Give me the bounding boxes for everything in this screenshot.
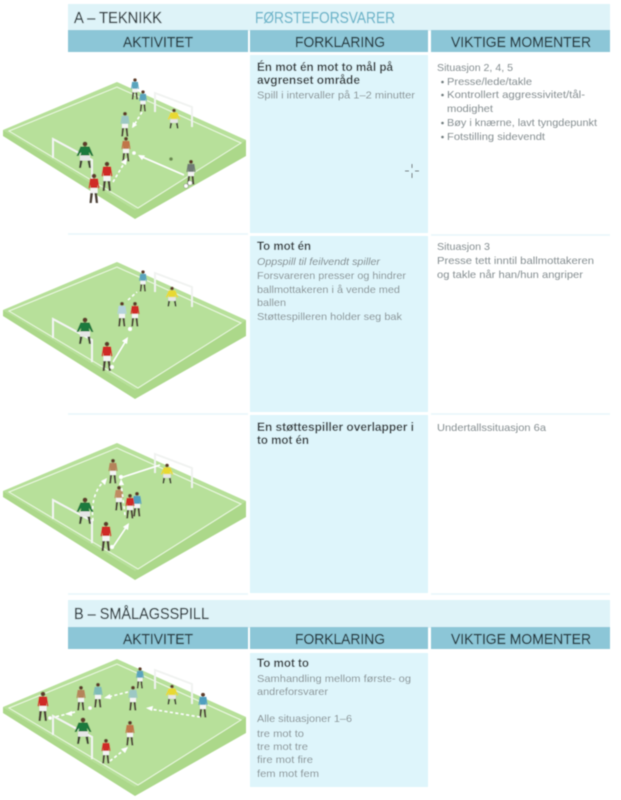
crosshair mark — [405, 164, 419, 178]
column heading: Forklaring: FORKLARING — [295, 631, 385, 648]
table header row A — [68, 30, 610, 52]
explanation panel: row B — [250, 653, 428, 787]
column heading: Aktivitet: AKTIVITET — [123, 34, 193, 51]
explanation panel: row 3 — [250, 415, 428, 593]
key points: row 2: og takle når han/hun angriper — [437, 269, 584, 281]
passing arrows — [113, 292, 137, 362]
bold title row 3: En støttespiller overlapper i — [257, 422, 414, 434]
row separators — [68, 233, 610, 595]
column heading: Viktige momenter: VIKTIGE MOMENTER — [451, 631, 591, 648]
explanation text row B: fem mot fem — [257, 768, 319, 780]
bold title row 1: Én mot én mot to mål på — [257, 61, 394, 74]
table header row B — [68, 627, 610, 649]
diagram: pitch row 3 — [3, 443, 246, 580]
section band: A - Teknikk — [68, 4, 610, 31]
explanation panel: row 1 — [250, 55, 428, 233]
column heading: Forklaring: FORKLARING — [295, 34, 385, 51]
column heading: Aktivitet: AKTIVITET — [123, 631, 193, 648]
key points: row 1: Bøy i knærne, lavt tyngdepunkt — [447, 117, 597, 129]
explanation text row 2: Forsvareren presser og hindrer — [257, 270, 407, 282]
key points: row 2: Presse tett inntil ballmottakeren — [437, 255, 594, 267]
explanation panel: row 2 — [250, 236, 428, 412]
key points: row 1: Situasjon 2, 4, 5 — [437, 62, 513, 74]
heading: Førsteforsvarer: FØRSTEFORSVARER — [255, 10, 395, 27]
players — [76, 459, 173, 551]
explanation text row B — [257, 673, 411, 780]
key points: row 1 — [437, 62, 597, 143]
bold title row B: To mot to — [257, 658, 309, 670]
column heading: Viktige momenter: VIKTIGE MOMENTER — [451, 34, 591, 51]
explanation text row 1: Spill i intervaller på 1–2 minutter — [257, 90, 416, 102]
explanation text row B: andreforsvarer — [257, 686, 329, 698]
passing arrows — [55, 692, 200, 761]
explanation text row 2: ballen — [257, 297, 286, 309]
arrow heads — [65, 694, 153, 753]
diagram: pitch row 2 — [3, 262, 246, 399]
explanation text row B: fire mot fire — [257, 754, 313, 766]
bold title row 2: To mot én — [257, 241, 311, 253]
section band: B - Smålagsspill — [68, 600, 610, 628]
explanation text row B: Alle situasjoner 1–6 — [257, 713, 352, 725]
key points: row 1: Fotstilling sidevendt — [447, 131, 545, 143]
bold title row 3 line 2: to mot én — [257, 435, 309, 447]
key points: row 1: modighet — [447, 103, 493, 115]
players — [38, 667, 208, 763]
diagram: pitch row B — [3, 659, 246, 796]
key points: row 1: Presse/lede/takle — [447, 76, 532, 88]
explanation text row 2: ballmottakeren i å vende med — [257, 284, 400, 296]
players — [76, 78, 196, 203]
key points: row 2: Situasjon 3 — [437, 241, 490, 253]
heading: B - Smålagsspill: B – SMÅLAGSSPILL — [74, 606, 209, 623]
key points: row 1: Kontrollert aggressivitet/tål- — [447, 89, 586, 101]
key points: row 2 — [437, 241, 594, 281]
players — [76, 270, 178, 371]
explanation text row 2 — [257, 270, 407, 323]
explanation text row 2: Støttespilleren holder seg bak — [257, 311, 403, 323]
key points: row 3: Undertallssituasjon 6a — [437, 422, 546, 434]
explanation text row B: tre mot tre — [257, 741, 308, 753]
passing and running arrows — [92, 465, 160, 547]
bold title row 1 line 2: avgrenset område — [257, 75, 360, 87]
heading: A - Teknikk: A – TEKNIKK — [74, 10, 163, 27]
passing arrows — [113, 112, 184, 182]
italic subtitle row 2: Oppspill til feilvendt spiller — [257, 257, 381, 268]
diagram: pitch row 1 — [3, 78, 246, 219]
explanation text row B: tre mot to — [257, 728, 304, 740]
explanation text row B: Samhandling mellom første- og — [257, 673, 411, 685]
